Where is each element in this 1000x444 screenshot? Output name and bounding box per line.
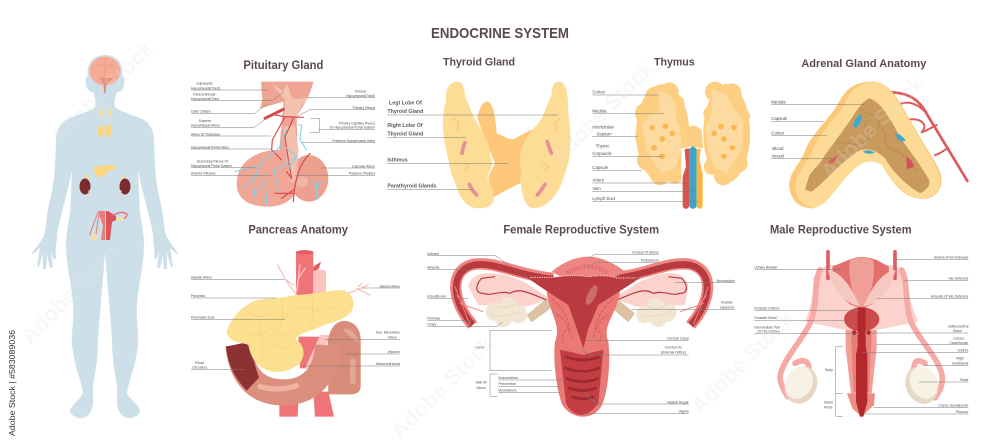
pituitary labels: Optic Chiasm <box>191 110 211 114</box>
title: ENDOCRINE SYSTEM <box>431 25 569 42</box>
male labels: Right <box>956 357 964 361</box>
adrenal labels <box>771 99 864 159</box>
ampulla and seminal vesicles <box>828 270 896 307</box>
right lobe <box>520 82 570 208</box>
uterine wall texture <box>552 298 613 342</box>
jejunum highlights <box>342 328 359 384</box>
duodenum highlight <box>260 386 297 389</box>
female labels: Myometrium <box>498 389 517 393</box>
hypothalamus and stalk <box>260 82 313 160</box>
pituitary labels: Hypophyseal Artery <box>191 124 220 128</box>
male labels: Epididymis <box>952 361 969 365</box>
female labels: Uterus <box>476 386 486 390</box>
panel: pancreas anatomy <box>191 224 400 417</box>
thymic corpuscles <box>649 123 737 159</box>
glans <box>847 393 875 417</box>
male labels: Intermediate Part <box>754 325 780 329</box>
stock watermarks: Adobe Stock <box>686 305 799 419</box>
pituitary labels: Hypophyseal(Tract <box>191 97 219 101</box>
adrenal labels: Capsule <box>771 116 788 121</box>
heading: pancreas anatomy: Pancreas Anatomy <box>248 224 348 237</box>
thymus labels <box>592 90 699 201</box>
adrenal cortex <box>795 82 940 208</box>
jejunum <box>328 321 361 394</box>
male labels: Cavernosum <box>949 341 969 345</box>
pituitary labels: Hypophyseal(Tract) <box>346 94 375 98</box>
pancreas labels: Jejunum <box>387 350 400 354</box>
stock id side text: Adobe Stock | #583089036 <box>7 330 17 436</box>
parathyroid glands <box>462 142 551 195</box>
female labels: Cervix <box>475 345 485 349</box>
testes <box>779 361 944 409</box>
pituitary labels: Of Hypophyseal Portal System <box>330 126 375 130</box>
pituitary labels: Paraventricular- <box>193 92 217 96</box>
adrenal labels: Cortex <box>771 130 785 135</box>
pelvic background <box>805 265 918 330</box>
lobe creases <box>452 118 560 193</box>
penis shaft <box>846 330 877 393</box>
male labels: Urethra <box>957 349 968 353</box>
thyroid labels: Legt Lobe Of <box>389 100 422 106</box>
stock watermarks: Adobe Stock <box>46 35 159 149</box>
female labels: Vaginal Rugae <box>667 400 689 404</box>
panel: pituitary gland <box>191 58 375 207</box>
female labels: Fundus Of Uterus <box>632 251 659 255</box>
urinary bladder <box>832 257 889 309</box>
female labels: Perimetrium <box>498 382 516 386</box>
pituitary labels: Secondary Plexus Of <box>197 159 228 163</box>
bladder inner <box>849 258 874 307</box>
adrenal medulla <box>805 98 929 193</box>
thymus labels: Thymic <box>596 144 610 149</box>
female labels: Vagina <box>679 410 689 414</box>
adrenal labels: Vessel <box>771 153 784 158</box>
female labels: Endometrium <box>498 376 518 380</box>
thymus labels: Capsule <box>592 165 609 170</box>
pituitary labels: Hypophyseal(Tract) <box>191 86 220 90</box>
pituitary labels: Posterior Pituitary <box>349 172 375 176</box>
male labels: Corpus Spongiosum <box>938 403 969 407</box>
female labels: Infundibulum <box>427 294 447 298</box>
aorta and vessels <box>278 250 370 417</box>
panel: thymus <box>592 56 750 210</box>
male labels: Bulbourethral <box>949 324 969 328</box>
stock watermarks: Adobe Stock <box>386 330 499 444</box>
female labels: Isthmus <box>427 252 439 256</box>
pituitary labels: Supraoptic- <box>196 82 214 86</box>
male labels: Corpus <box>953 336 964 340</box>
blue and red vessels in medulla <box>828 114 914 169</box>
pancreas labels: Pancreatic Duct <box>191 316 215 320</box>
broad ligament fill <box>468 273 688 307</box>
male labels: Urinary Bladder <box>754 265 778 269</box>
male labels: Body <box>825 368 833 372</box>
panel: human body with endocrine organs <box>32 55 178 418</box>
stock watermarks: Adobe Stock <box>546 55 659 169</box>
bulbourethral glands <box>852 330 871 335</box>
pituitary labels: Hypophyseal Portal Veins <box>191 145 229 149</box>
thymus labels: Artery <box>592 178 605 183</box>
thyroid isthmus and pyramid <box>477 102 537 198</box>
thymus medulla <box>642 88 743 173</box>
female labels <box>427 251 735 414</box>
vagina <box>560 350 603 415</box>
heading: male reproductive system: Male Reproductive System <box>770 224 912 237</box>
icon: kidneys <box>80 176 130 203</box>
heading: pituitary gland: Pituitary Gland <box>243 58 323 72</box>
panel: adrenal gland anatomy <box>771 58 967 208</box>
plicae circulares dark section <box>226 342 259 391</box>
heading: adrenal gland anatomy: Adrenal Gland Anatomy <box>801 58 927 70</box>
thymus labels: Medula <box>592 108 607 113</box>
uterus fundus <box>552 257 625 282</box>
vaginal rugae <box>564 357 600 399</box>
anterior and posterior lobes <box>237 125 328 207</box>
thyroid labels: Thyroid Gland <box>387 131 423 137</box>
icon: mini pancreas <box>94 165 116 177</box>
female labels: Mesosalpinx <box>716 279 735 283</box>
pancreas lobules <box>245 295 342 362</box>
pancreas labels: Abdominal Aorta <box>376 362 400 366</box>
pituitary labels: Posterior Hypophyseal Veins <box>332 139 375 143</box>
medulla folds <box>823 108 917 170</box>
panel: female reproductive system <box>427 224 735 417</box>
uterus and cervix wall <box>547 275 620 417</box>
heading: female reproductive system: Female Reproductive System <box>503 224 659 237</box>
pituitary labels: Anterior Pituitary <box>191 172 216 176</box>
pituitary labels: Superior <box>199 119 212 123</box>
female labels: Ovarian <box>721 300 733 304</box>
male labels: Of The Urethra <box>757 330 780 334</box>
arteries <box>265 109 310 202</box>
pituitary labels: Artery Of Trabecula <box>191 132 220 136</box>
icon: mini thyroid <box>98 106 111 118</box>
icon: mini thymus <box>97 124 112 137</box>
left lobe <box>443 82 494 208</box>
male labels: Ampulla Of Vas Deferens <box>931 294 969 298</box>
pancreas labels: Plicae <box>195 361 204 365</box>
fundus texture <box>567 267 608 273</box>
fallopian tubes <box>455 264 708 325</box>
female labels: Fimbriae <box>427 316 440 320</box>
male labels: Gland <box>953 329 962 333</box>
ovarian ligaments <box>527 298 635 322</box>
male labels <box>754 256 969 416</box>
thyroid labels: Right Lobe Of <box>387 123 423 129</box>
duodenum <box>238 345 328 392</box>
male labels: Prepuce <box>956 410 968 414</box>
stock watermarks: Adobe Stock <box>16 235 129 349</box>
icon: brain <box>90 56 120 93</box>
adrenal labels: Medula <box>771 99 786 104</box>
thyroid labels <box>387 100 558 190</box>
highlight in uterus <box>584 284 600 306</box>
panel: male reproductive system <box>754 224 969 417</box>
female labels: (External Orifice) <box>661 351 686 355</box>
ovarian vessels <box>477 277 686 300</box>
vas deferens <box>780 270 942 398</box>
thyroid labels: Thyroid Gland <box>387 109 423 115</box>
thyroid labels: Isthmus <box>387 158 408 164</box>
pancreas labels: Artery <box>388 335 397 339</box>
ureters <box>828 252 895 278</box>
female labels: Ovary <box>427 323 437 327</box>
female labels: Ligament <box>720 306 734 310</box>
pancreas labels: Circulares <box>192 366 207 370</box>
thymus labels: Lymph Duct <box>592 196 616 201</box>
pituitary labels: Tuberal- <box>355 89 367 93</box>
ovaries <box>486 297 677 327</box>
thymus lobes <box>635 82 750 185</box>
pancreas labels: Sup. Mesenteric <box>376 331 400 335</box>
male labels: Penis <box>824 406 833 410</box>
heading: thymus: Thymus <box>654 56 695 68</box>
pituitary labels <box>191 82 375 176</box>
pancreas labels: Hepatic Artery <box>191 276 212 280</box>
pancreas labels <box>191 276 400 370</box>
pancreas labels: Pancreas <box>191 294 205 298</box>
female labels: Cervical Os <box>665 345 682 349</box>
thymus labels: Cortex <box>592 90 606 95</box>
epididymis <box>795 361 925 370</box>
corpus cavernosum <box>851 335 872 392</box>
male labels: Testis <box>960 378 969 382</box>
thyroid labels: Parathyroid Glands <box>387 184 437 190</box>
pituitary labels: Primary Capillary Plexus <box>339 122 375 126</box>
pituitary labels: Capsular Artery <box>352 164 375 168</box>
pituitary labels: Primary Plexus <box>353 106 375 110</box>
female labels: Cervical Canal <box>667 336 689 340</box>
heading: thyroid gland: Thyroid Gland <box>443 57 515 69</box>
endometrial dashed line <box>530 276 637 278</box>
stock watermarks: Adobe Stock <box>816 70 929 184</box>
panel: thyroid gland <box>387 57 570 208</box>
female labels: Wall Of <box>476 380 486 384</box>
adrenal labels: Blood <box>772 146 784 151</box>
pancreas labels: Splenic Artery <box>379 284 400 288</box>
adrenal capsule <box>789 82 941 208</box>
pancreas body <box>227 290 353 372</box>
prostate gland <box>844 307 879 331</box>
male labels: Prostatic Urethra <box>754 307 779 311</box>
male labels: Ureters (From Kidneys) <box>934 256 968 260</box>
veins <box>235 125 322 205</box>
male labels: Gland <box>824 400 833 404</box>
adrenal blood vessels <box>892 92 967 181</box>
thymus labels: Interlobular <box>592 124 615 129</box>
female labels: Perimetrium <box>641 259 659 263</box>
urethra <box>856 308 867 417</box>
thymus labels: Vein <box>592 186 601 191</box>
male labels: Vas Deferens <box>948 277 969 281</box>
pituitary labels: Hypophyseal Portal System <box>191 164 232 168</box>
thymus labels: Corpuscle <box>592 151 612 156</box>
icon: mini reproductive organs <box>90 211 127 240</box>
body silhouette <box>32 55 178 418</box>
thymus labels: Septum <box>597 131 612 136</box>
female labels: Ampulla <box>427 266 440 270</box>
male labels: Prostate Gland <box>754 316 777 320</box>
artery, vein and lymph duct <box>681 146 704 210</box>
uterus cavity body <box>527 276 640 348</box>
